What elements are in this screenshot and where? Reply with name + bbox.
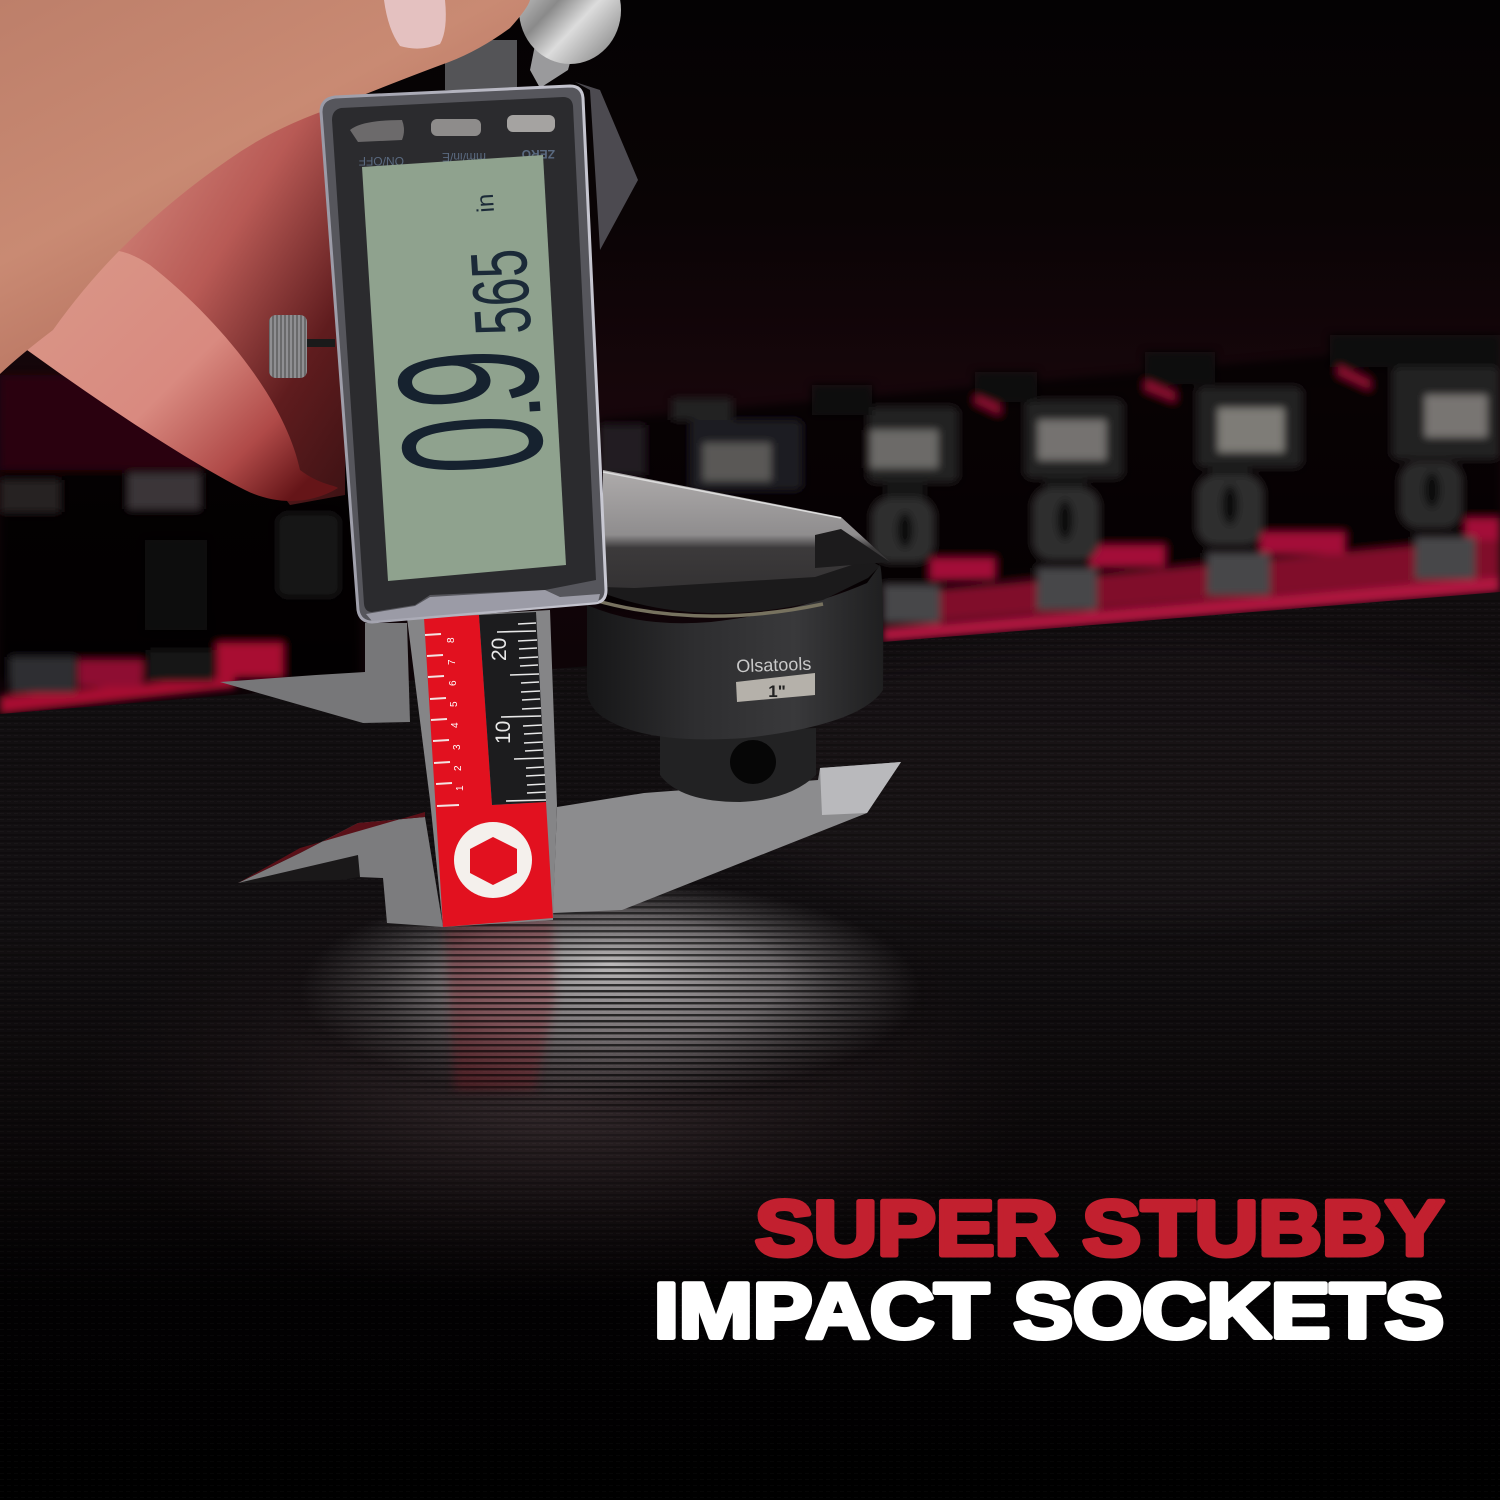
zero button <box>507 115 555 132</box>
shadow band behind sockets <box>600 340 1500 610</box>
headline line 1: SUPER STUBBY <box>755 1184 1444 1272</box>
upper finger <box>90 90 345 505</box>
mm/in button <box>431 119 481 136</box>
inch numbers: 1 <box>455 785 466 791</box>
caliper lower left jaw <box>238 812 443 927</box>
socket opening <box>600 555 880 613</box>
socket size label: 1" <box>768 682 786 701</box>
palm and thumb <box>0 0 530 374</box>
inch numbers: 3 <box>452 744 463 750</box>
background wall <box>0 0 1500 720</box>
caliper rear body <box>575 82 638 250</box>
button labels <box>359 147 555 168</box>
inch numbers: 5 <box>449 701 460 707</box>
headline <box>654 1184 1444 1354</box>
socket brand: Olsatools <box>736 654 812 676</box>
millimetre numbers <box>488 638 515 744</box>
inch numbers: 4 <box>450 722 461 728</box>
caliper main beam <box>407 610 557 927</box>
millimetre ticks <box>497 623 546 801</box>
socket 4 <box>1145 352 1302 595</box>
caliper upper left jaw <box>220 623 410 723</box>
hexagon logo <box>454 822 532 898</box>
light spot <box>320 890 901 1110</box>
inch numbers <box>446 637 466 791</box>
blurred socket row on red rail <box>0 335 1500 714</box>
large digits reading: . <box>449 391 563 426</box>
button labels: ON/OFF <box>359 154 404 168</box>
caliper upper right jaw <box>603 470 890 588</box>
inch numbers: 2 <box>453 765 464 771</box>
button labels: mm/in/E <box>442 150 486 164</box>
on/off button <box>350 120 404 142</box>
dark bezel <box>332 97 596 612</box>
millimetre numbers: 20 <box>488 638 511 661</box>
socket 1 <box>672 398 802 490</box>
small digits reading: 565 <box>454 247 549 337</box>
floor surface <box>0 592 1500 1294</box>
main socket <box>587 555 883 802</box>
red scale label <box>424 615 553 927</box>
headline line 2: IMPACT SOCKETS <box>654 1266 1444 1354</box>
metal frame <box>321 86 606 622</box>
socket size label <box>736 673 815 702</box>
button labels: ZERO <box>522 147 555 161</box>
black scale strip <box>479 612 546 805</box>
caliper depth scale <box>424 612 553 927</box>
locking knob <box>269 315 335 378</box>
millimetre numbers: 10 <box>492 721 515 744</box>
left sockets <box>0 375 645 680</box>
hand <box>0 0 530 505</box>
socket 5 <box>1330 335 1500 579</box>
socket body <box>587 565 883 739</box>
caliper lower right jaw <box>553 762 901 913</box>
LCD screen <box>362 155 566 581</box>
inch numbers: 6 <box>448 680 459 686</box>
red rail <box>0 518 1500 714</box>
bottom frame tab <box>366 590 600 621</box>
large digits reading: 0 <box>359 409 586 480</box>
socket 2 <box>812 385 958 623</box>
socket 3 <box>975 372 1123 610</box>
caliper thumb wheel <box>445 0 621 90</box>
large digits reading: 9 <box>355 343 582 414</box>
digital caliper display body <box>321 86 606 622</box>
lower finger <box>20 250 338 501</box>
inch ticks <box>425 634 459 806</box>
socket rim <box>594 600 823 616</box>
inch numbers: 8 <box>446 637 457 643</box>
large digits reading <box>355 343 586 480</box>
socket drive end <box>660 728 816 802</box>
thumbnail <box>384 0 446 49</box>
unit reading: in <box>472 193 500 213</box>
inch numbers: 7 <box>447 659 458 665</box>
